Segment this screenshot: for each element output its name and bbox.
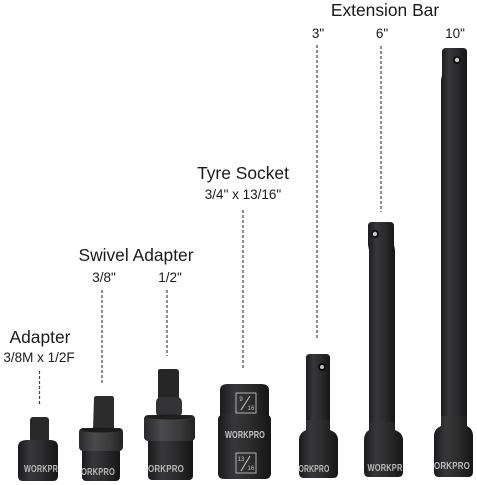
size stamp: 13/16: [236, 453, 256, 473]
label: Adapter size: 3/8M x 1/2F: [3, 350, 75, 365]
tool: swivel adapter 3/8: [79, 396, 123, 481]
heading: Adapter: Adapter: [10, 327, 71, 347]
tool: adapter: [18, 417, 58, 481]
heading: Extension Bar: Extension Bar: [331, 0, 439, 20]
label: 3 inch: 3": [312, 26, 324, 41]
label: 10 inch: 10": [445, 26, 465, 41]
tool: swivel adapter 1/2: ORKPRO: [148, 463, 184, 475]
label: 3/8 inch: 3/8": [92, 270, 116, 285]
size stamp: 9/16: 16: [248, 406, 255, 412]
tool: extension bar 3 inch: ORKPRO: [298, 463, 330, 475]
heading: Tyre Socket: Tyre Socket: [197, 163, 289, 183]
tool: extension bar 3 inch: [298, 354, 338, 478]
tool: extension bar 6 inch: WORKPR: [368, 462, 403, 474]
heading: Swivel Adapter: Swivel Adapter: [78, 245, 194, 265]
tool: adapter: WORKPR: [24, 463, 58, 475]
leader lines: [40, 45, 381, 405]
label: 1/2 inch: 1/2": [158, 270, 182, 285]
size stamp: 9/16: [236, 393, 256, 413]
tool: extension bar 6 inch: [364, 222, 403, 477]
tool: extension bar 10 inch: [434, 48, 473, 477]
size stamp: 13/16: 16: [248, 466, 255, 472]
tool: tyre socket: [218, 384, 271, 479]
label: Tyre Socket size: 3/4" x 13/16": [205, 187, 281, 202]
tool: tyre socket: WORKPRO: [225, 429, 265, 441]
tool: swivel adapter 3/8: ORKPRO: [81, 466, 115, 478]
size stamp: 9/16: 9: [239, 397, 243, 403]
size stamp: 13/16: 13: [238, 457, 245, 463]
tool: swivel adapter 1/2: [144, 369, 195, 480]
label: 6 inch: 6": [376, 26, 388, 41]
